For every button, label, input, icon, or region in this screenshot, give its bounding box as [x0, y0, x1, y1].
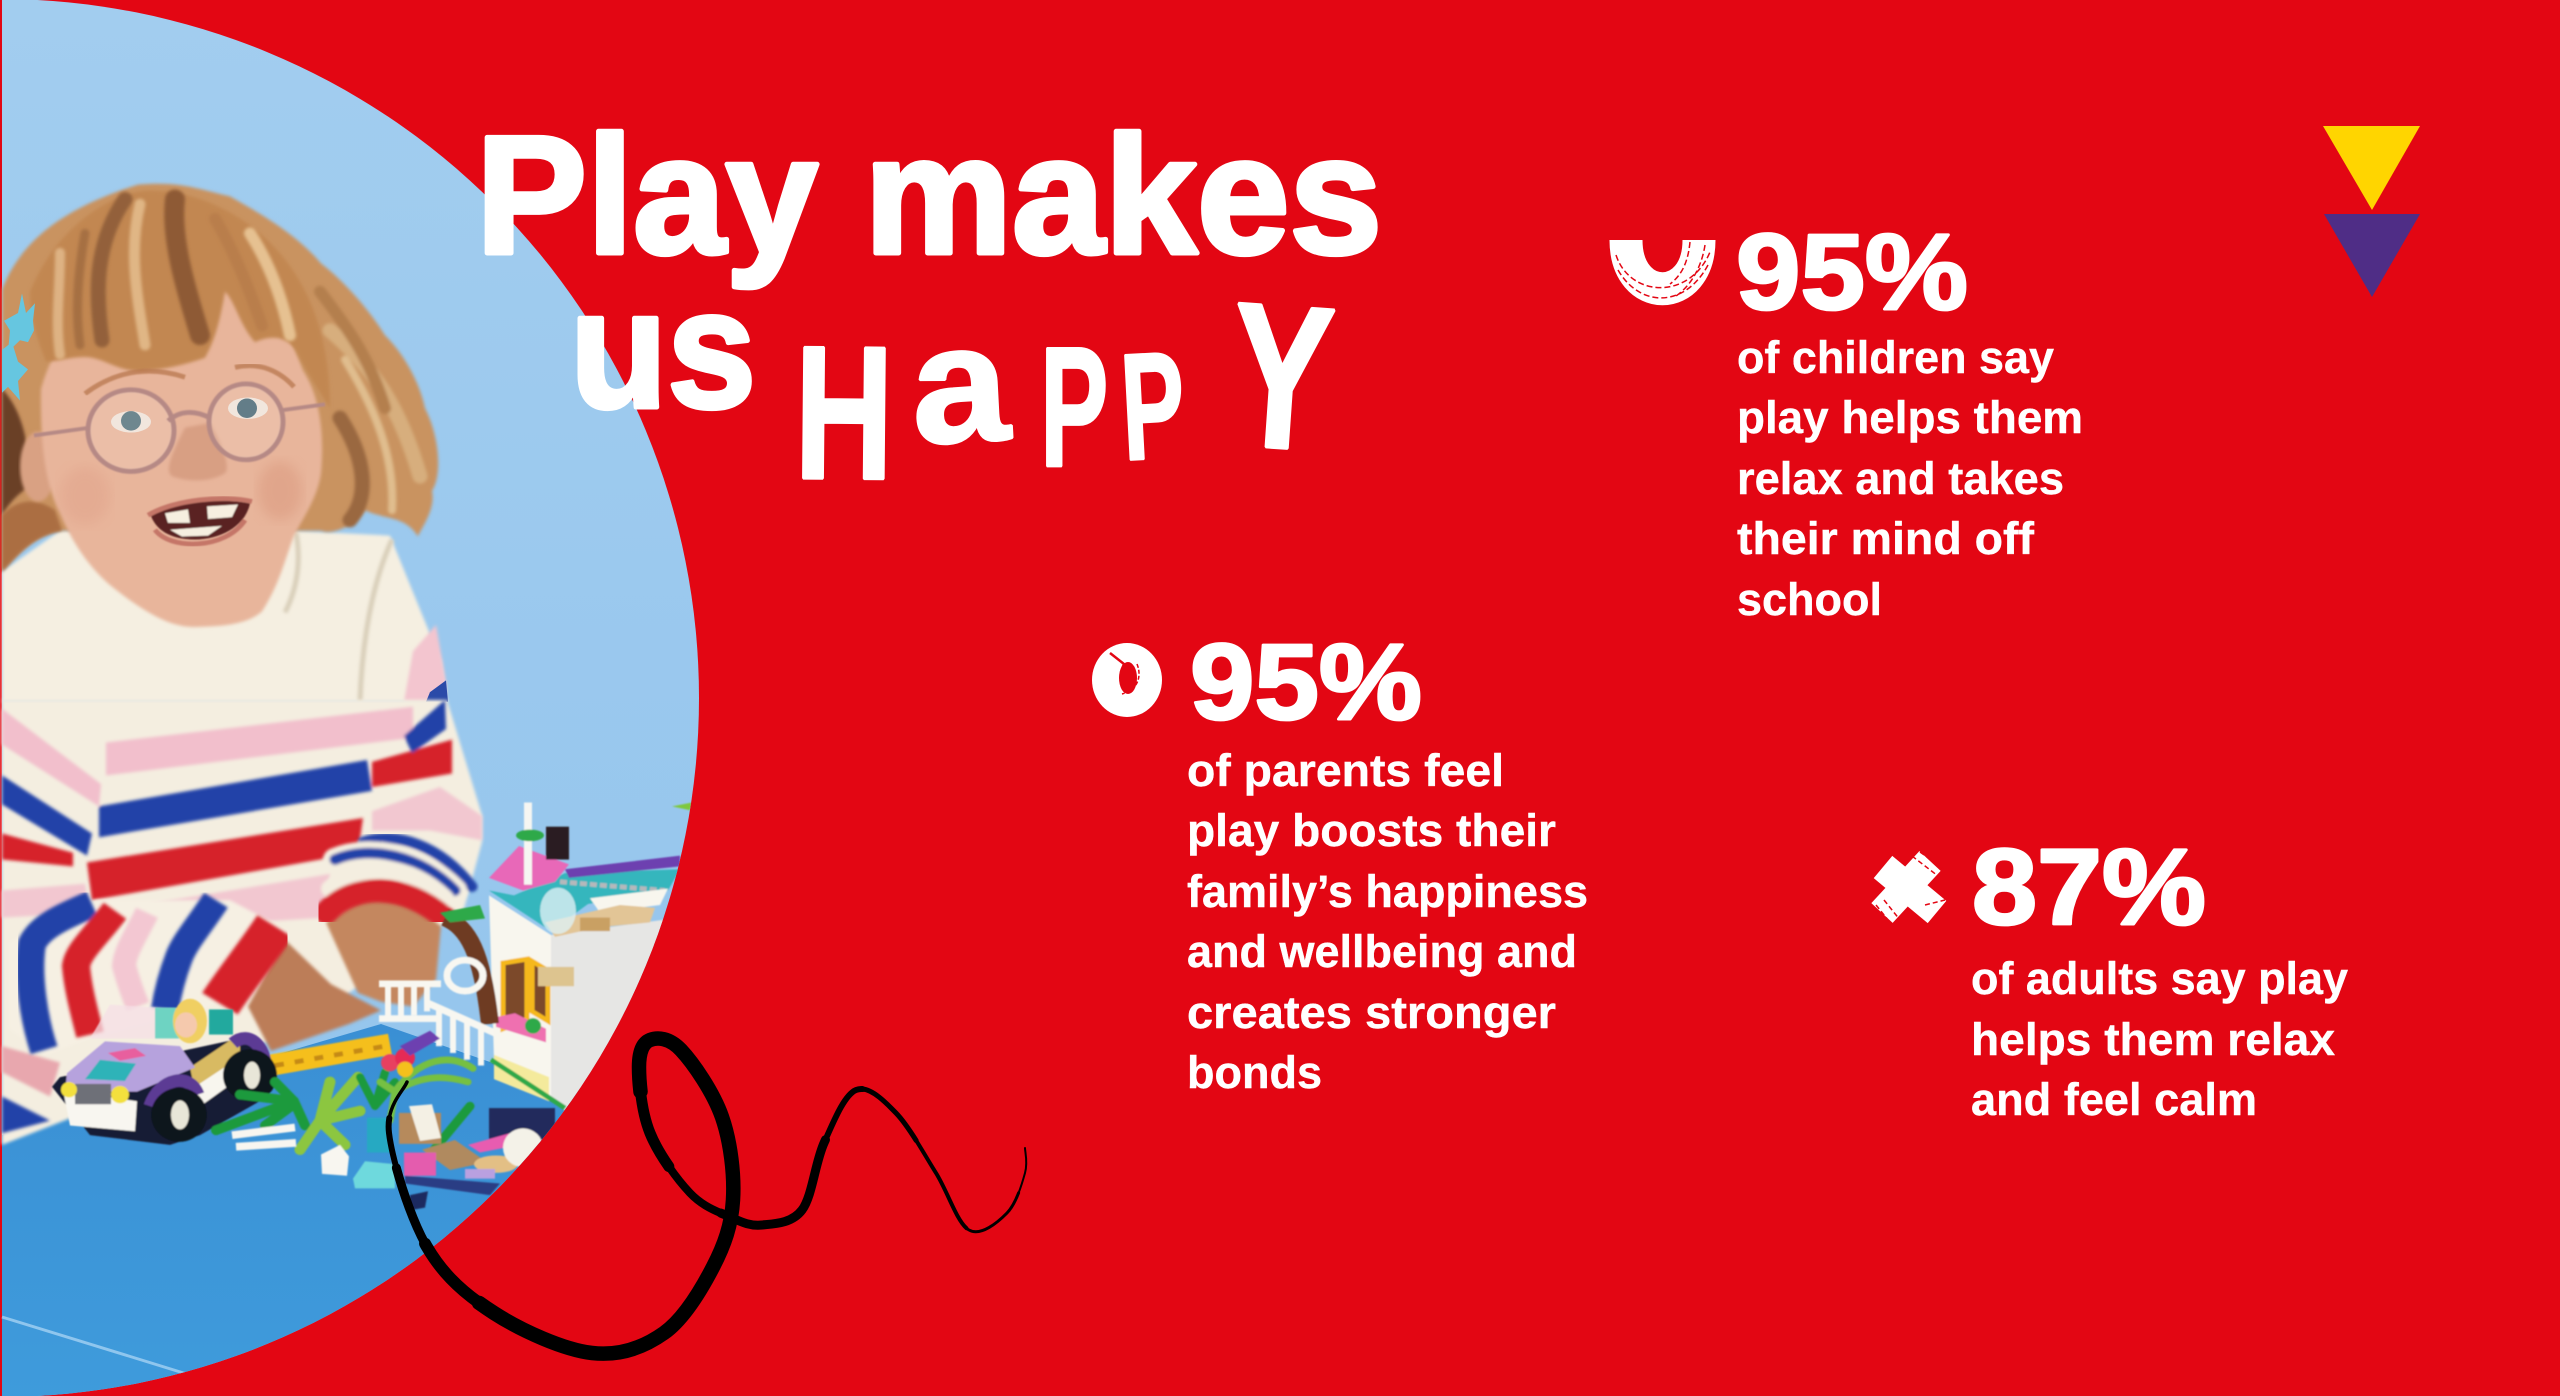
sweater shoulders — [2, 531, 447, 702]
glasses — [34, 384, 325, 471]
white fences — [379, 960, 494, 1066]
title — [476, 101, 1382, 443]
percentage: 87% — [1972, 826, 2206, 947]
tree arch — [445, 918, 490, 1024]
description: of parents feel — [1187, 745, 1504, 796]
eyebrows — [85, 366, 294, 394]
description — [1971, 953, 2348, 1125]
eyes — [111, 411, 151, 433]
girl: lower body, sleeves and hands — [2, 700, 482, 1145]
left hand — [248, 940, 381, 1051]
description: relax and takes — [1737, 453, 2064, 504]
circular photo: girl playing with bricks — [2, 0, 702, 1396]
roof terrace — [489, 869, 680, 931]
right hand — [326, 895, 441, 1007]
percentage: 95% — [1736, 211, 1968, 332]
fringe — [30, 191, 330, 408]
stat: parents — [1092, 621, 1588, 1098]
ear — [20, 432, 56, 502]
stat: children — [1616, 211, 2083, 625]
nose — [169, 423, 227, 480]
toy figure — [173, 999, 207, 1043]
title line 2: us — [570, 255, 756, 443]
table top — [2, 1024, 577, 1396]
smiling mouth — [148, 499, 252, 544]
plants — [216, 1060, 473, 1154]
description: creates stronger — [1187, 987, 1556, 1038]
yellow triangle — [2323, 126, 2420, 210]
description — [1737, 332, 2083, 625]
icon: star hair clips — [2, 294, 35, 400]
description: and wellbeing and — [1187, 926, 1577, 977]
stat: adults — [1876, 826, 2348, 1125]
hair back — [2, 184, 438, 572]
icon: brushed U shape — [1616, 240, 1710, 298]
house — [489, 803, 692, 1111]
description: and feel calm — [1971, 1074, 2257, 1125]
description: of children say — [1737, 332, 2054, 383]
icon: brushed X shape — [1876, 852, 1945, 925]
icon: brushed O shape — [1092, 643, 1162, 717]
description: helps them relax — [1971, 1014, 2335, 1065]
description: their mind off — [1737, 513, 2035, 564]
description: play boosts their — [1187, 805, 1556, 856]
title line 1: Play makes — [476, 101, 1382, 289]
hand-lettered word: happy: a — [906, 288, 1015, 480]
description: school — [1737, 574, 1882, 625]
loose bricks — [232, 1031, 555, 1211]
toy car — [52, 999, 277, 1145]
description: family’s happiness — [1187, 866, 1588, 917]
hand-lettered word: happy: H — [794, 307, 894, 520]
description: of adults say play — [1971, 953, 2348, 1004]
hand-lettered word: happy: P — [1117, 319, 1189, 492]
yellow ladder — [269, 1044, 390, 1066]
hand-lettered word: happy: Y — [1223, 260, 1340, 495]
left sleeve — [92, 898, 270, 932]
percentage: 95% — [1190, 621, 1422, 742]
hand-lettered word: happy: P — [1040, 311, 1108, 502]
door — [503, 959, 548, 1029]
flower box — [496, 1013, 546, 1042]
photo backdrop: blue wall — [2, 0, 702, 1396]
face — [41, 267, 322, 627]
sweater stripes — [2, 700, 482, 1133]
girl: upper body and head — [2, 184, 448, 702]
lego set on the table — [52, 803, 692, 1211]
description: play helps them — [1737, 392, 2083, 443]
purple triangle — [2324, 214, 2420, 297]
description — [1187, 745, 1588, 1098]
sweater body — [2, 700, 482, 1145]
black squiggle line — [389, 1038, 1026, 1354]
description: bonds — [1187, 1047, 1322, 1098]
hand-lettered word: happy — [794, 260, 1340, 520]
decorative triangles — [2323, 126, 2420, 297]
right cuff — [326, 838, 472, 918]
